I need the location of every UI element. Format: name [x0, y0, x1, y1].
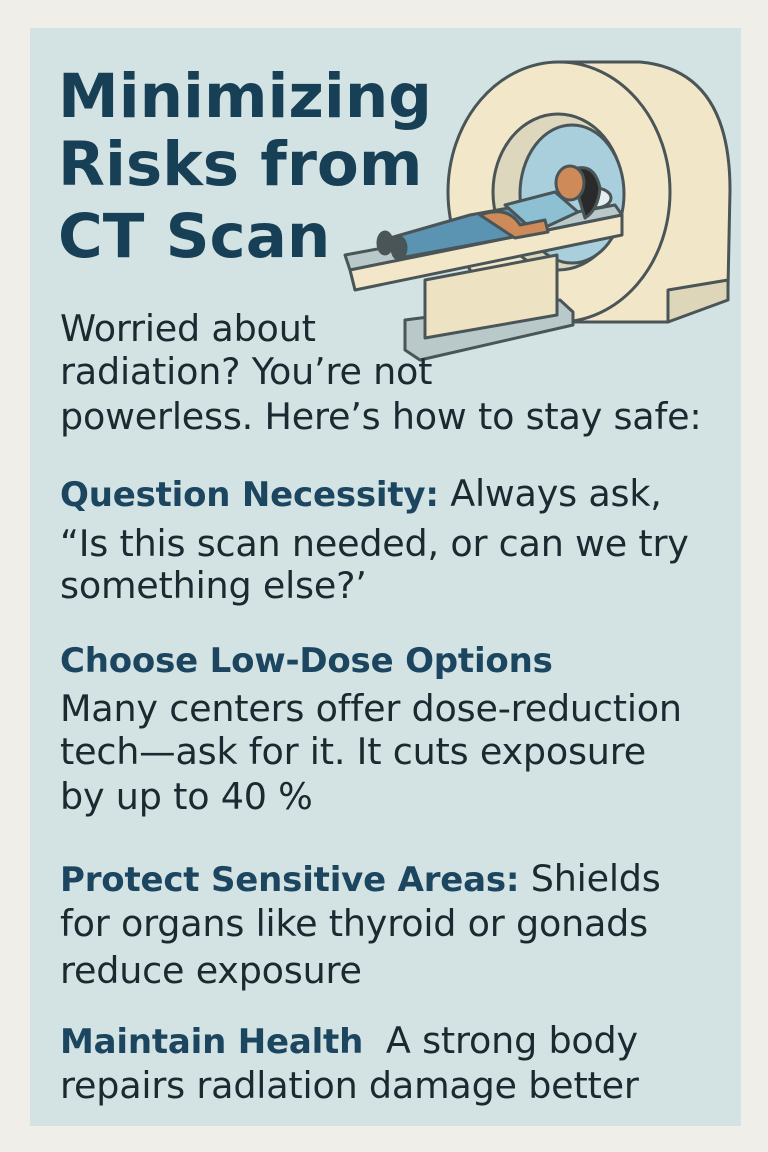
tip 4: maintain health: [60, 1019, 639, 1107]
title: CT Scan: [58, 201, 330, 272]
table: [345, 205, 622, 270]
gantry front ring: [448, 62, 670, 322]
pillow: [579, 188, 611, 208]
tip 3: protect sensitive areas: reduce exposure: [60, 949, 362, 992]
floor plate: [405, 300, 573, 360]
intro text: Worried about: [60, 307, 316, 350]
title: Risks from: [58, 129, 422, 200]
tip 2: low-dose options: by up to 40 %: [60, 775, 313, 818]
tip 3: protect sensitive areas: [60, 857, 661, 992]
tip 1: question necessity: something else?’: [60, 564, 367, 607]
tip 1: question necessity: “Is this scan needed, or can we try: [60, 522, 689, 565]
pedestal: [425, 255, 557, 338]
illustration: CT scanner with patient: [344, 60, 732, 362]
tip 4: maintain health: repairs radlation damage better: [60, 1064, 639, 1107]
tip 4: maintain health: Maintain Health A strong body: [60, 1019, 638, 1062]
tip 1: question necessity: Question Necessity: Always ask,: [60, 472, 662, 515]
gantry back: [559, 62, 730, 322]
title: Minimizing: [58, 61, 432, 132]
tip 3: protect sensitive areas: for organs like thyroid or gonads: [60, 902, 648, 945]
tip 2: low-dose options: Many centers offer dose-reduction: [60, 687, 682, 730]
patient: [390, 205, 540, 258]
title: [58, 61, 432, 272]
intro text: [60, 307, 701, 438]
intro text: powerless. Here’s how to stay safe:: [60, 395, 701, 438]
tip 3: protect sensitive areas: Protect Sensitive Areas: Shields: [60, 857, 661, 900]
tip 2: low-dose options: tech—ask for it. It cuts exposure: [60, 730, 646, 773]
tip 2: low-dose options: Choose Low-Dose Options: [60, 641, 553, 681]
tip 1: question necessity: [60, 472, 689, 607]
intro text: radiation? You’re not: [60, 350, 432, 393]
tip 2: low-dose options: [60, 641, 682, 818]
